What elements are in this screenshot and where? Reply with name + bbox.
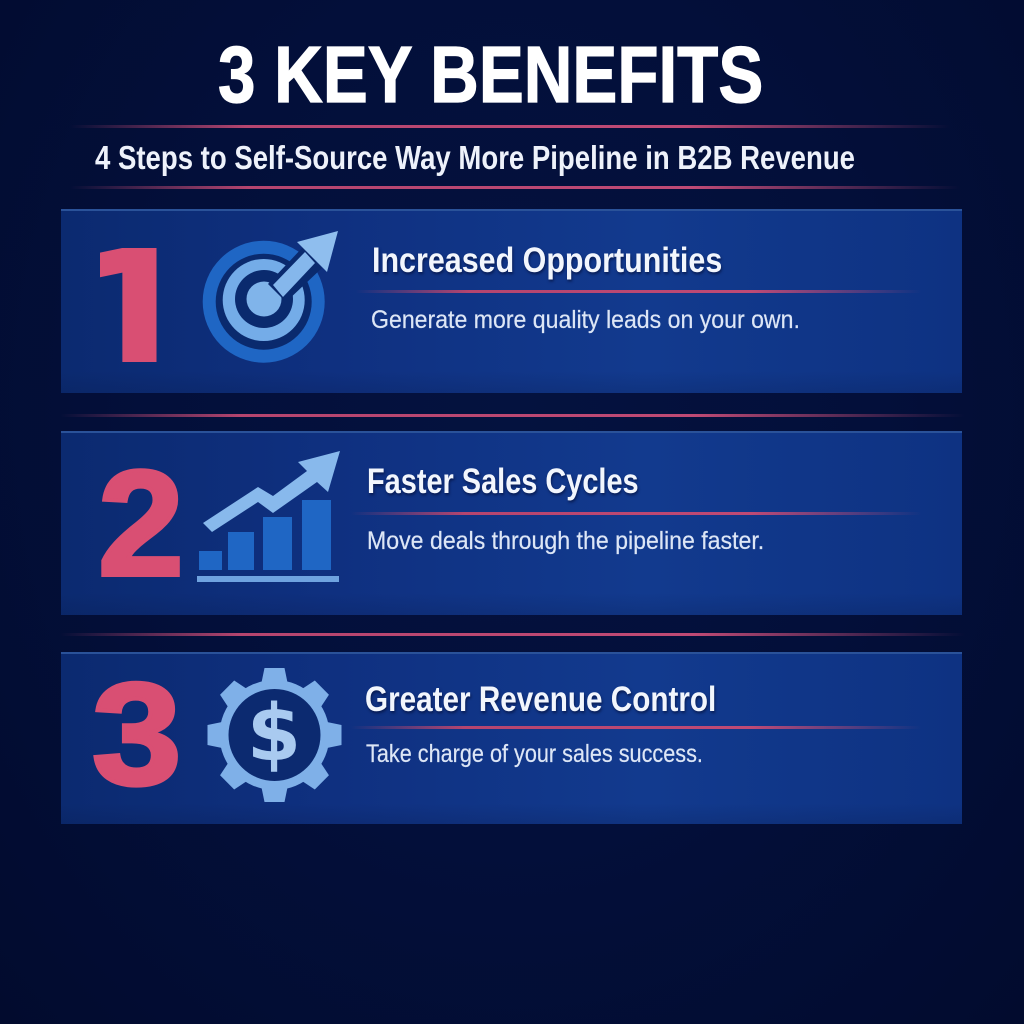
icon: bar chart with arrow <box>197 451 340 582</box>
subtitle divider <box>70 186 960 189</box>
subtitle: 4 Steps to Self-Source Way More Pipeline in B2B Revenue <box>95 139 855 176</box>
description 1: Generate more quality leads on your own. <box>371 306 800 334</box>
divider 1 <box>60 414 965 417</box>
panel: benefit 1 <box>61 209 962 393</box>
icon: target with arrow <box>202 231 338 363</box>
heading 1: Increased Opportunities <box>372 241 722 280</box>
top divider <box>70 125 950 128</box>
heading rule 1 <box>356 290 921 293</box>
divider 2 <box>60 633 965 636</box>
icon: gear with dollar <box>208 668 342 802</box>
heading rule 2 <box>351 512 921 515</box>
heading 3: Greater Revenue Control <box>365 680 716 719</box>
description 3: Take charge of your sales success. <box>366 740 703 768</box>
icon: gear with dollar: $ <box>247 689 301 779</box>
number 3: 3 <box>92 653 182 815</box>
description 2: Move deals through the pipeline faster. <box>367 527 764 555</box>
panel: benefit 2 <box>61 431 962 615</box>
number 2: 2 <box>98 439 184 607</box>
panel: benefit 3 <box>61 652 962 824</box>
title: 3 KEY BENEFITS <box>218 30 763 119</box>
heading 2: Faster Sales Cycles <box>367 462 639 501</box>
heading rule 3 <box>351 726 921 729</box>
